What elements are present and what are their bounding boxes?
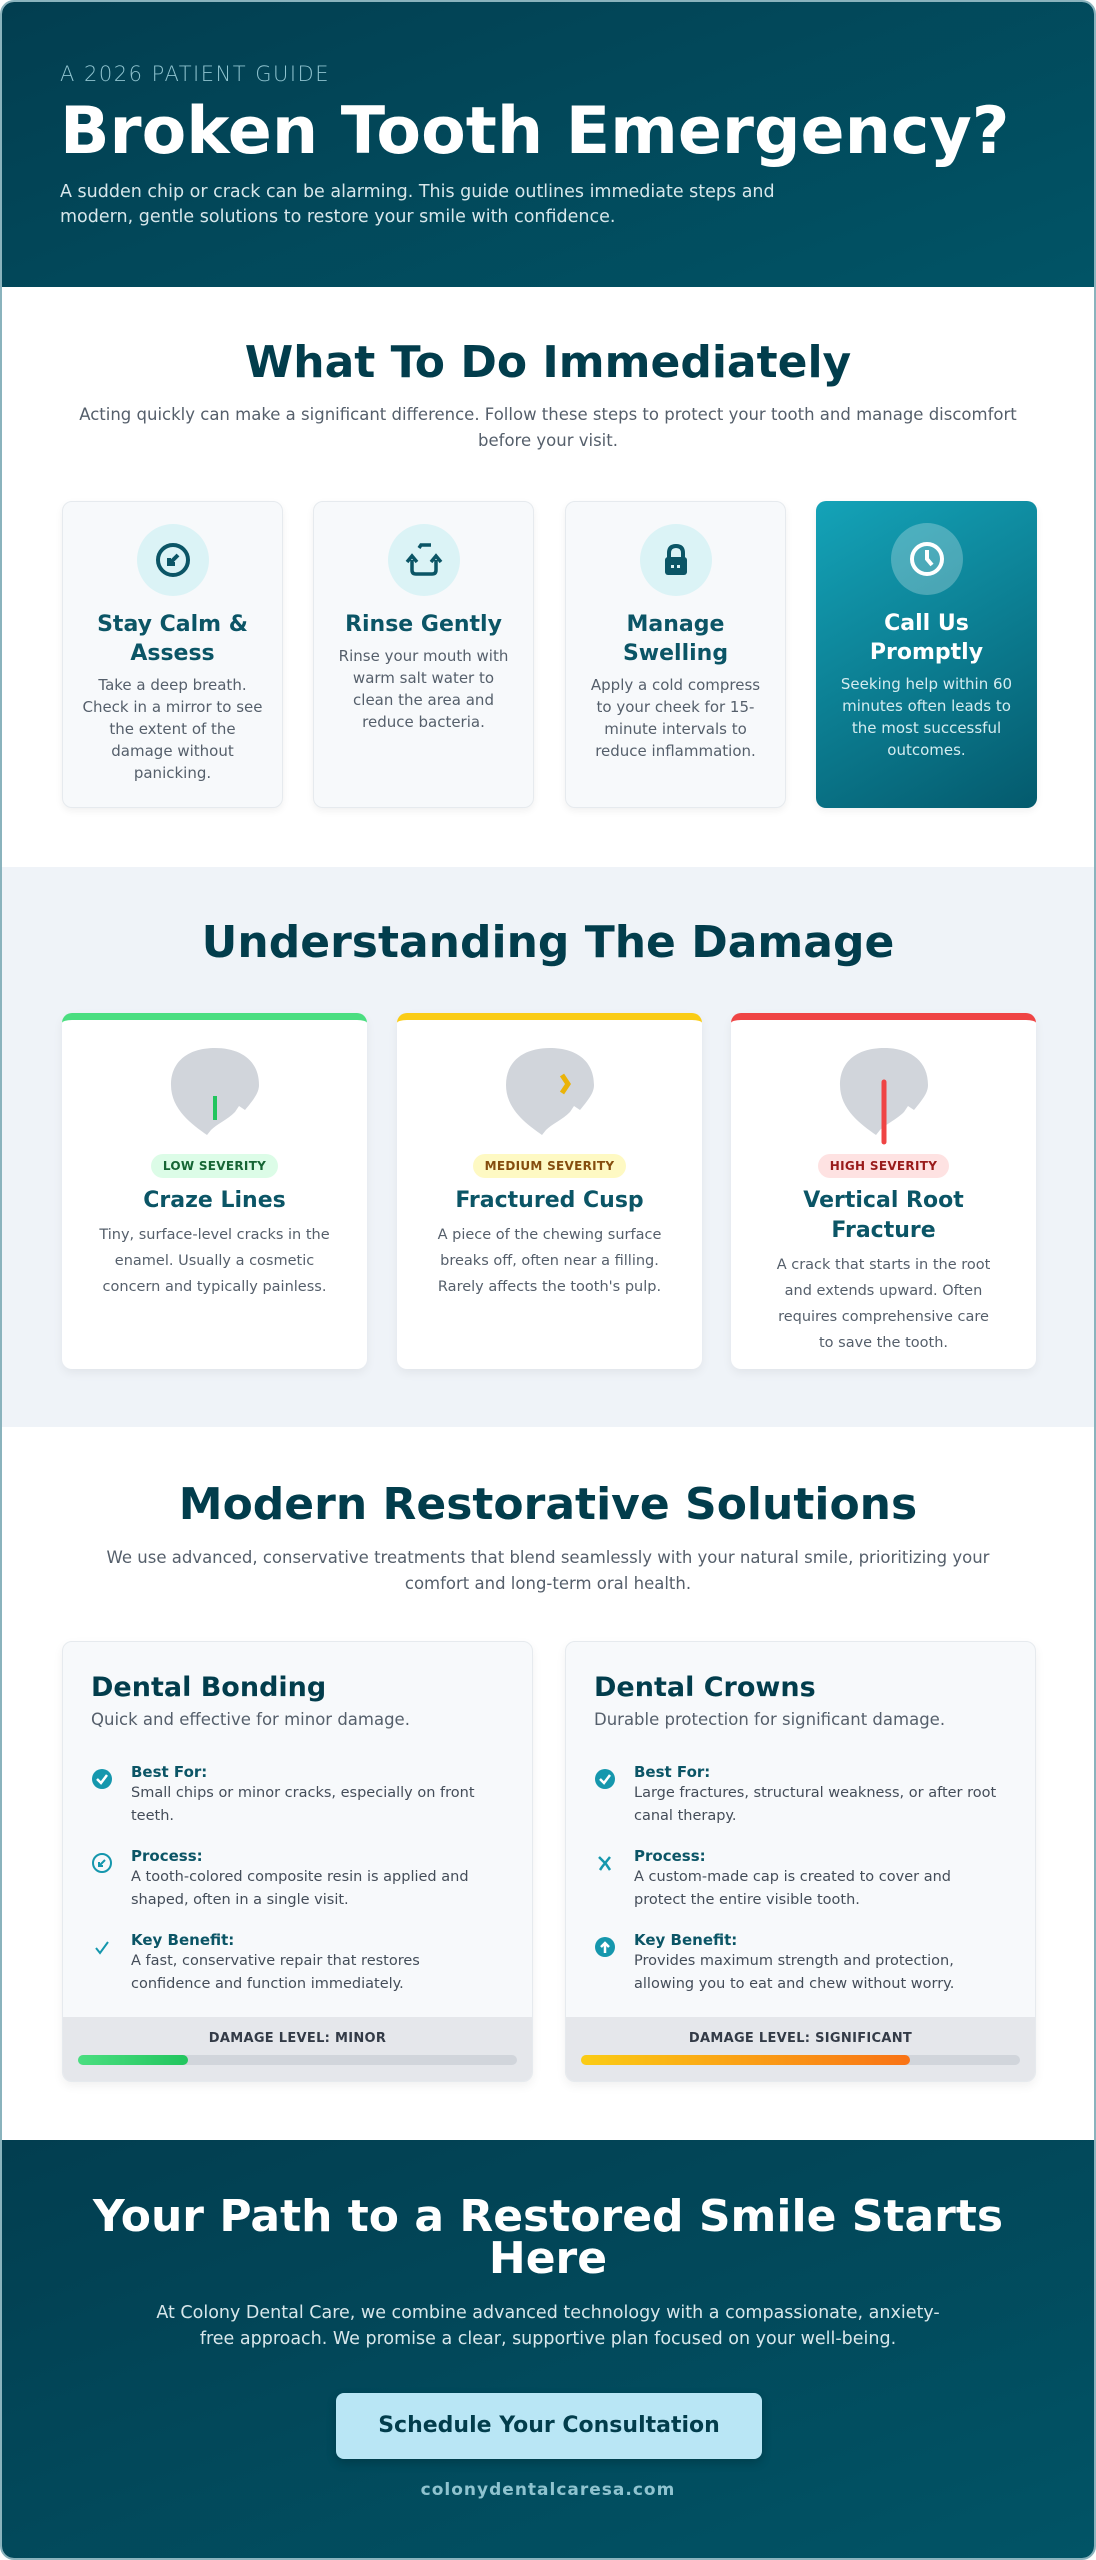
intro: We use advanced, conservative treatments that blend seamlessly with your natural smile, prioritizing your comfort and long-term oral health. (107, 1548, 989, 1593)
title: Broken Tooth Emergency? (60, 94, 1009, 169)
card: call us (816, 501, 1037, 808)
heading: Understanding The Damage (202, 917, 894, 968)
card: vertical root: Vertical Root Fracture (803, 1188, 964, 1243)
card: call us: Call Us Promptly (870, 611, 983, 665)
item: process: A tooth-colored composite resin is applied and shaped, often in a single visit. (131, 1869, 469, 1908)
heading: What To Do Immediately (245, 337, 851, 388)
damage meter (566, 2017, 1035, 2081)
section: immediate steps (2, 287, 1094, 867)
damage meter (63, 2017, 532, 2081)
card: crowns (565, 1641, 1036, 2082)
item: process (598, 1847, 951, 1908)
card: rinse (313, 501, 534, 808)
item: benefit (595, 1931, 954, 1992)
card: rinse: Rinse your mouth with warm salt water to clean the area and reduce bacteria. (339, 647, 508, 731)
header (2, 2, 1094, 287)
badge: LOW SEVERITY (163, 1159, 266, 1173)
heading: Modern Restorative Solutions (179, 1479, 917, 1530)
card: bonding (62, 1641, 533, 2082)
item: benefit (95, 1931, 420, 1992)
item: benefit: Key Benefit: (634, 1931, 737, 1949)
card: fractured cusp: Fractured Cusp (455, 1188, 644, 1213)
section: CTA footer (2, 2140, 1094, 2560)
item: best for: Large fractures, structural weakness, or after root canal therapy. (634, 1785, 996, 1824)
item: best for: Best For: (131, 1763, 207, 1781)
card: crowns: Durable protection for significant damage. (594, 1710, 945, 1729)
damage meter: DAMAGE LEVEL: SIGNIFICANT (689, 2031, 912, 2046)
section: solutions (2, 1427, 1094, 2140)
card: craze lines: Craze Lines (143, 1188, 286, 1213)
card: fractured cusp: A piece of the chewing surface breaks off, often near a filling. Rarely affects the tooth's pulp. (438, 1227, 661, 1295)
button (336, 2393, 762, 2459)
item: best for: Best For: (634, 1763, 710, 1781)
badge: HIGH SEVERITY (830, 1159, 937, 1173)
damage meter: DAMAGE LEVEL: MINOR (209, 2031, 386, 2046)
icon: rinse (388, 524, 460, 596)
button: Schedule Your Consultation (378, 2413, 720, 2438)
card: craze lines: Tiny, surface-level cracks in the enamel. Usually a cosmetic concern and typically painless. (99, 1227, 330, 1295)
badge: MEDIUM SEVERITY (485, 1159, 614, 1173)
section: damage (2, 867, 1094, 1427)
kicker: A 2026 PATIENT GUIDE (60, 62, 330, 86)
item: benefit: A fast, conservative repair that restores confidence and function immediately. (131, 1953, 420, 1992)
card: swelling: Manage Swelling (623, 612, 728, 666)
card: rinse: Rinse Gently (345, 612, 502, 637)
CTA heading: Your Path to a Restored Smile Starts Here (93, 2191, 1003, 2284)
item: process (92, 1847, 469, 1908)
card: swelling (565, 501, 786, 808)
item: process: Process: (131, 1847, 203, 1865)
card: crowns: Dental Crowns (594, 1672, 816, 1703)
intro: Acting quickly can make a significant difference. Follow these steps to protect your tooth and manage discomfort before your visit. (79, 405, 1017, 450)
card: call us: Seeking help within 60 minutes often leads to the most successful outcomes. (841, 675, 1012, 759)
icon: lock (640, 524, 712, 596)
card: craze lines (62, 1013, 367, 1369)
website: colonydentalcaresa.com (421, 2480, 675, 2500)
icon: tooth low (171, 1048, 259, 1135)
card: stay calm: Take a deep breath. Check in a mirror to see the extent of the damage without panicking. (82, 676, 263, 782)
icon: tooth medium (506, 1048, 594, 1135)
card: swelling: Apply a cold compress to your cheek for 15-minute intervals to reduce inflammation. (591, 676, 760, 760)
card: bonding: Dental Bonding (91, 1672, 326, 1703)
card: vertical root (731, 1013, 1036, 1369)
icon: timer (136, 524, 208, 596)
card: bonding: Quick and effective for minor damage. (91, 1710, 410, 1729)
item: process: A custom-made cap is created to cover and protect the entire visible tooth. (634, 1869, 951, 1908)
card: stay calm (62, 501, 283, 808)
item: best for (92, 1763, 475, 1824)
card: stay calm: Stay Calm & Assess (97, 612, 248, 666)
card: fractured cusp (397, 1013, 702, 1369)
icon: clock (890, 523, 962, 595)
card: vertical root: A crack that starts in the root and extends upward. Often requires comprehensive care to save the tooth. (777, 1257, 990, 1351)
item: benefit: Key Benefit: (131, 1931, 234, 1949)
item: benefit: Provides maximum strength and protection, allowing you to eat and chew without worry. (634, 1953, 954, 1992)
item: best for (595, 1763, 996, 1824)
item: best for: Small chips or minor cracks, especially on front teeth. (131, 1785, 475, 1824)
icon: tooth high (840, 1048, 928, 1144)
CTA text: At Colony Dental Care, we combine advanced technology with a compassionate, anxiety-free approach. We promise a clear, supportive plan focused on your well-being. (156, 2303, 940, 2349)
intro text: A sudden chip or crack can be alarming. This guide outlines immediate steps and modern, gentle solutions to restore your smile with confidence. (60, 182, 775, 227)
item: process: Process: (634, 1847, 706, 1865)
